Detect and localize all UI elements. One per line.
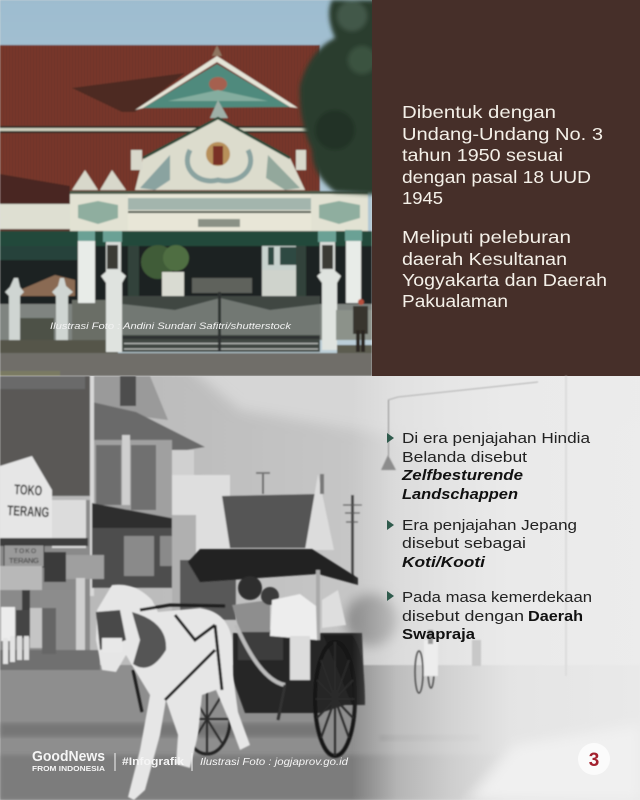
text: merger paragraph bbox=[402, 227, 607, 311]
photo credit: Ilustrasi Foto : jogjaprov.go.id bbox=[200, 757, 348, 768]
photo: historic street with horse carriage: TERANG bbox=[9, 556, 39, 565]
bullet 3: independence era: Daerah bbox=[528, 608, 583, 625]
fade overlay behind bullets bbox=[350, 376, 640, 800]
photo: Kraton Yogyakarta gate bbox=[0, 0, 372, 376]
bullet 2: Japanese era: Era penjajahan Jepang bbox=[402, 517, 577, 534]
text: formation paragraph: Dibentuk dengan bbox=[402, 102, 556, 122]
illustration: white horse bbox=[96, 585, 250, 800]
bullet 2: Japanese era bbox=[387, 517, 577, 571]
text: merger paragraph: daerah Kesultanan bbox=[402, 249, 567, 269]
text: merger paragraph: Meliputi peleburan bbox=[402, 227, 571, 247]
footer credits bbox=[32, 748, 348, 773]
text: formation paragraph: Undang-Undang No. 3 bbox=[402, 124, 603, 144]
bullet 3: independence era: Pada masa kemerdekaan bbox=[402, 589, 592, 606]
bullet 1: Dutch era bbox=[387, 430, 591, 503]
pale lower-right haze bbox=[475, 739, 606, 800]
logo: GoodNews: GoodNews bbox=[32, 748, 105, 765]
text: merger paragraph: Yogyakarta dan Daerah bbox=[402, 270, 607, 290]
bullet list bbox=[387, 430, 592, 643]
distant street details bbox=[381, 376, 567, 693]
text: formation paragraph: 1945 bbox=[402, 188, 443, 208]
logo: GoodNews: FROM INDONESIA bbox=[32, 764, 106, 773]
text: formation paragraph bbox=[402, 102, 603, 208]
text: formation paragraph: dengan pasal 18 UUD bbox=[402, 167, 591, 187]
bullet 3: independence era: Swapraja bbox=[402, 626, 476, 643]
text: formation paragraph: tahun 1950 sesuai bbox=[402, 145, 563, 165]
tree foliage bbox=[300, 0, 380, 195]
page number badge bbox=[578, 743, 610, 775]
illustration: carriage bbox=[184, 549, 365, 756]
text: merger paragraph: Pakualaman bbox=[402, 291, 508, 311]
photo: historic street with horse carriage: TOKO bbox=[14, 548, 36, 555]
bullet 1: Dutch era: Belanda disebut bbox=[402, 449, 528, 466]
logo: GoodNews bbox=[32, 748, 106, 773]
hashtag: #Infografik bbox=[122, 756, 185, 768]
bullet 2: Japanese era: Koti/Kooti bbox=[402, 554, 486, 571]
bullet 1: Dutch era: Landschappen bbox=[402, 486, 518, 503]
photo caption: Ilustrasi Foto : Andini Sundari Safitri/shutterstock bbox=[50, 321, 292, 331]
bullet 1: Dutch era: Zelfbesturende bbox=[401, 467, 523, 484]
photo: historic street with horse carriage: TOKO bbox=[14, 481, 43, 498]
page number badge: 3 bbox=[589, 750, 599, 771]
bullet 3: independence era: disebut dengan bbox=[402, 608, 524, 625]
bullet 2: Japanese era: disebut sebagai bbox=[402, 535, 526, 552]
photo: historic street with horse carriage bbox=[0, 376, 504, 800]
panel: brown text panel bbox=[372, 0, 640, 376]
bullet 3: independence era bbox=[387, 589, 592, 643]
bullet 1: Dutch era: Di era penjajahan Hindia bbox=[402, 430, 591, 447]
photo: historic street with horse carriage: TERANG bbox=[7, 502, 50, 520]
